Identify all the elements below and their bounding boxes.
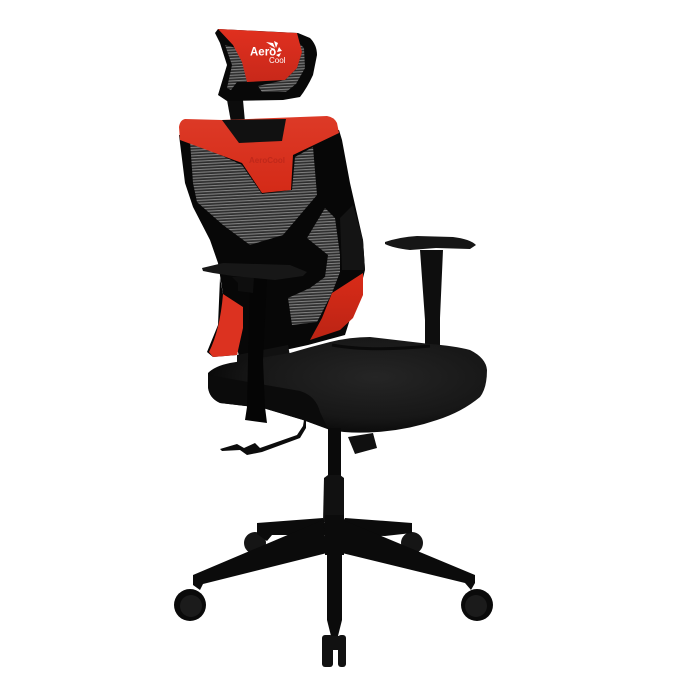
black notch in red panel [222, 119, 286, 143]
lower left panel outline [207, 278, 243, 357]
headrest [215, 29, 317, 101]
base hub [325, 515, 344, 555]
lower left red panel [209, 294, 243, 357]
front armrest [202, 263, 307, 423]
front leg [327, 522, 342, 636]
upper mesh panel [190, 141, 317, 245]
five star base [193, 515, 475, 636]
logo: Aero wordmark: Aero [250, 46, 276, 58]
tilt knob [348, 433, 377, 454]
right leg [342, 520, 475, 590]
headrest frame [215, 29, 317, 101]
seat cushion [208, 337, 487, 433]
rear casters [244, 532, 423, 554]
backrest black frame [179, 130, 365, 360]
headrest mesh left [225, 45, 247, 90]
backrest brand text: AeroCool [249, 156, 285, 165]
headrest post [227, 100, 245, 122]
rear right caster [401, 532, 423, 554]
front casters [174, 589, 493, 667]
upper column [328, 428, 341, 478]
logo: Cool wordmark: Cool [269, 56, 286, 65]
left caster [174, 589, 206, 621]
rear armrest [385, 236, 476, 346]
rear right leg [335, 518, 412, 536]
rear armrest pad [385, 236, 476, 250]
front armrest pad [202, 263, 307, 280]
right mesh panel [288, 208, 340, 325]
lower column [323, 475, 344, 522]
seat rear dip [332, 345, 430, 349]
backrest [179, 116, 365, 360]
logo: fan icon [266, 41, 282, 57]
rear left leg [257, 518, 330, 541]
lower right red panel [310, 273, 363, 340]
tilt lever [220, 420, 306, 455]
front caster [322, 635, 346, 667]
seat front left side [208, 375, 328, 429]
left leg [193, 520, 327, 590]
front armrest post [245, 278, 267, 423]
seat body [208, 337, 487, 433]
right frame highlight [340, 205, 365, 270]
upper red panel [179, 116, 339, 193]
headrest red panel [218, 29, 302, 82]
rear armrest post [420, 250, 443, 346]
headrest mesh right [258, 42, 305, 92]
front armrest bracket [232, 277, 254, 293]
rear left caster [244, 532, 266, 554]
back to seat connector [237, 345, 290, 366]
right caster [461, 589, 493, 621]
gas lift column [323, 428, 344, 522]
